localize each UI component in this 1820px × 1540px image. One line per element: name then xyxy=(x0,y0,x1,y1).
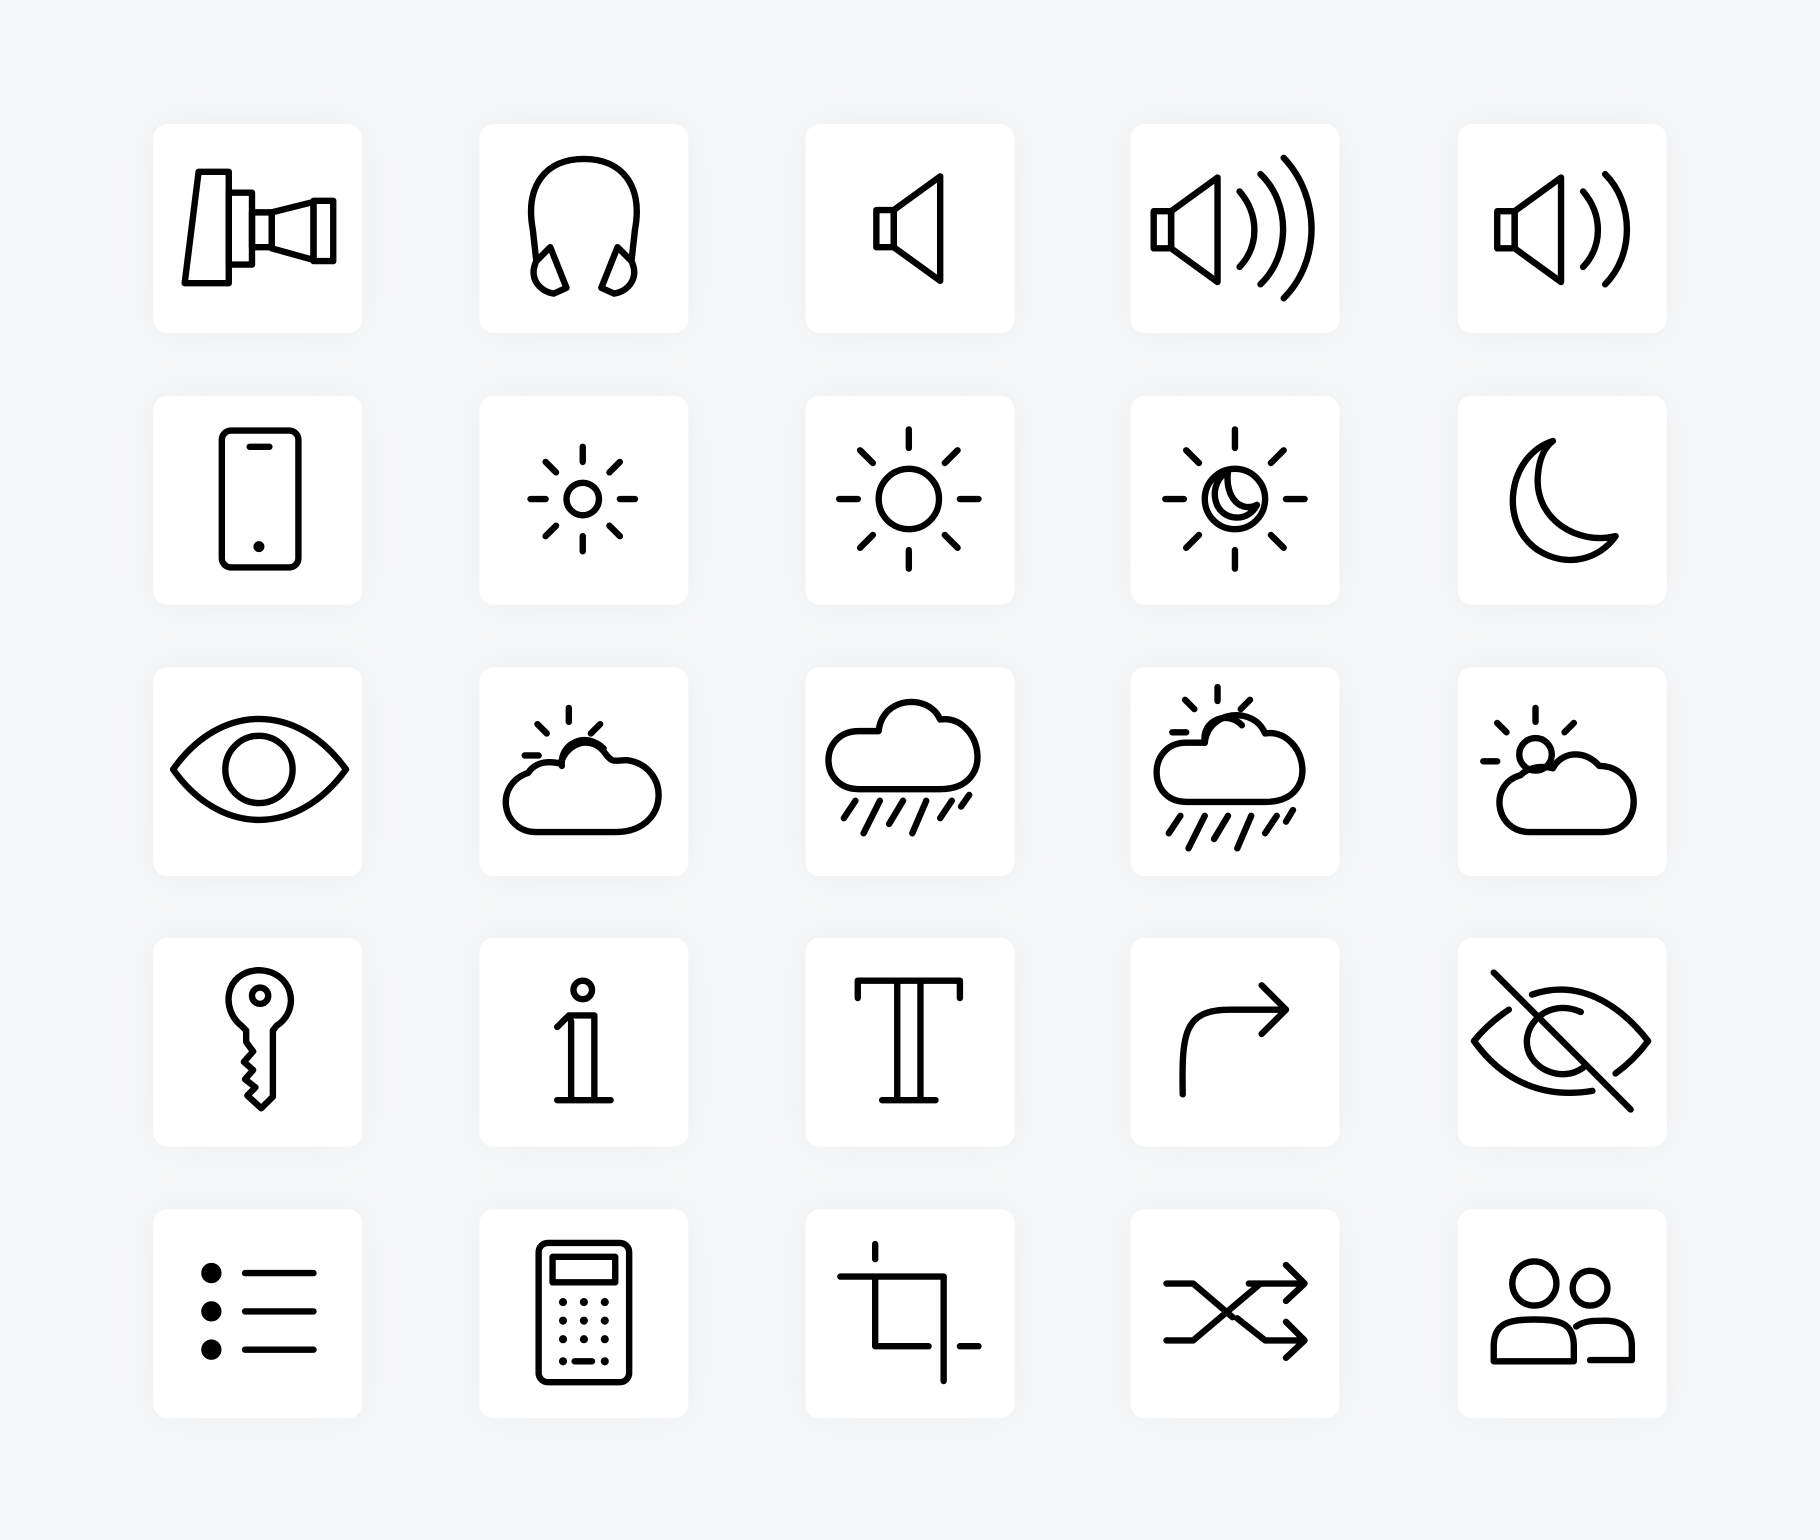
icon: headphones xyxy=(531,159,637,294)
icon: redirect arrow xyxy=(1183,985,1286,1094)
icon: shuffle xyxy=(1166,1265,1305,1358)
icon: speaker loud xyxy=(1154,158,1312,298)
icon: info xyxy=(557,981,611,1100)
icon: sun with moon xyxy=(1165,429,1305,569)
icon: partly cloudy xyxy=(506,708,659,832)
icon: eye hidden xyxy=(1474,973,1648,1109)
icon: list xyxy=(204,1266,313,1357)
icon: users xyxy=(1494,1261,1632,1361)
icon: crop xyxy=(840,1244,978,1381)
icon: phone xyxy=(222,431,298,567)
icon: key xyxy=(229,970,291,1108)
icon: calculator xyxy=(539,1243,629,1382)
icon: partly cloudy 2 xyxy=(1483,708,1634,832)
icon: sun small xyxy=(531,447,635,551)
icon: moon xyxy=(1513,441,1616,560)
icon: text T xyxy=(858,981,960,1100)
icon: rain cloud xyxy=(828,702,977,833)
icon: eye xyxy=(173,719,346,820)
icon: speaker xyxy=(876,176,940,281)
icon: telescope xyxy=(185,172,333,283)
icon: speaker medium xyxy=(1497,174,1627,284)
icon: sun xyxy=(839,429,978,569)
icon: rain with sun xyxy=(1157,687,1302,848)
